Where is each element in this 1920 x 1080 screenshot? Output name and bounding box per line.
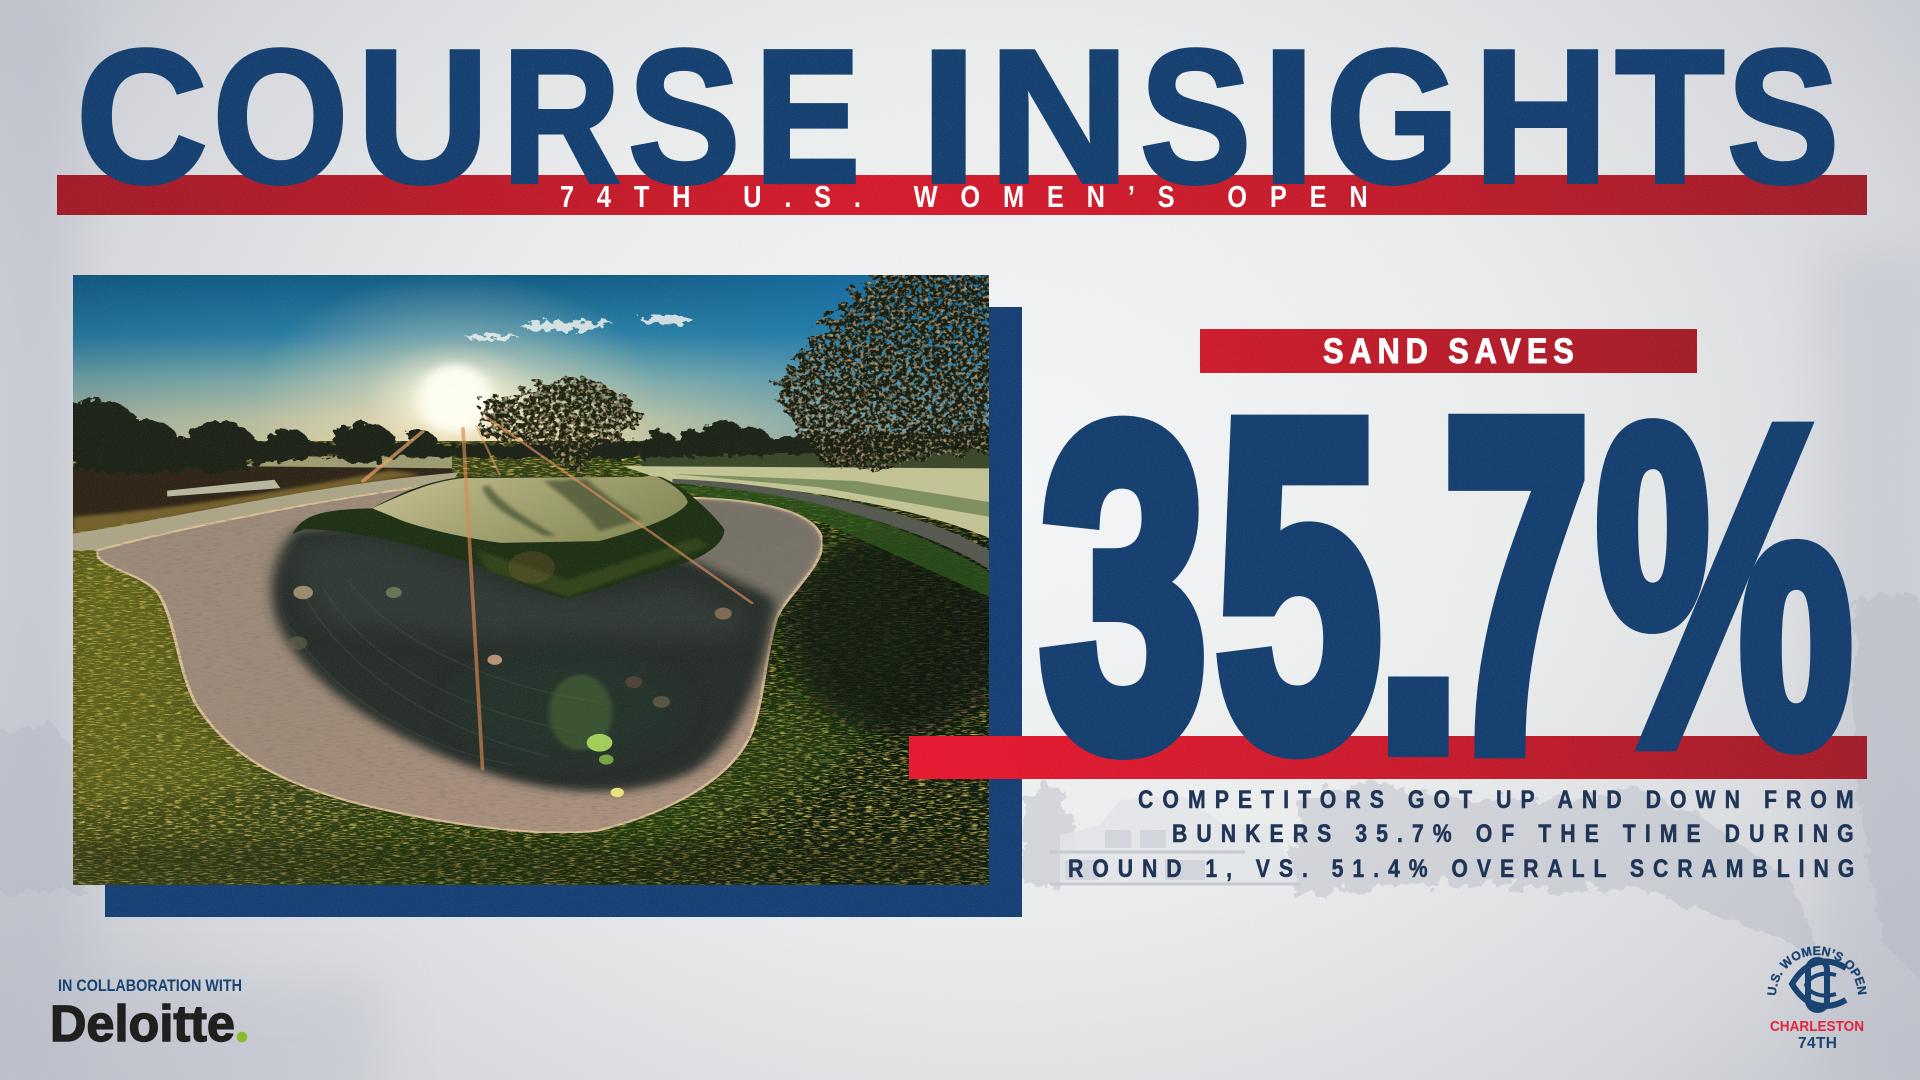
cart path along bunker: [73, 473, 458, 550]
description text: COMPETITORS GOT UP AND DOWN FROM: [1138, 785, 1854, 813]
title: T: [1615, 11, 1724, 223]
sun glow: [276, 280, 633, 441]
red band under stat: [909, 736, 1867, 779]
big number: 35.7%: 3: [1041, 335, 1207, 840]
big number: 35.7%: .: [1376, 393, 1461, 830]
sponsor: Deloitte collaboration: IN COLLABORATION WITH: [58, 977, 242, 995]
bunker sand: [97, 483, 822, 833]
title: C: [76, 11, 208, 223]
rake lines in shadow: [293, 580, 599, 765]
logo: 74th U.S. Women's Open Charleston: [1767, 946, 1867, 1052]
green mound: [293, 477, 724, 599]
stat label box: sand saves: [1200, 329, 1697, 373]
subtitle: 74TH U.S. WOMEN’S OPEN: [560, 180, 1368, 215]
lens flare dots: [288, 551, 732, 797]
title: I: [920, 11, 977, 223]
stat label box: sand saves: SAND SAVES: [1323, 331, 1574, 370]
right tree: [777, 268, 1003, 470]
title: G: [1326, 11, 1459, 223]
logo: 74th U.S. Women's Open Charleston: U.S. WOMEN’S OPEN: [1767, 946, 1867, 996]
title: H: [1473, 11, 1609, 223]
red band under title: [57, 175, 1867, 215]
title: U: [357, 10, 489, 223]
title: S: [1140, 10, 1251, 222]
clouds: [465, 315, 692, 339]
title: S: [628, 11, 740, 223]
big number: 35.7%: [1041, 325, 1854, 845]
big number: 35.7%: %: [1595, 331, 1854, 839]
title: I: [1262, 11, 1315, 223]
lens flare rays: [363, 418, 752, 769]
logo: 74th U.S. Women's Open Charleston: CHARLESTON: [1770, 1019, 1864, 1035]
bunker shadow: [272, 521, 774, 792]
big number: 35.7%: 7: [1444, 325, 1589, 845]
big number: 35.7%: 5: [1216, 328, 1381, 842]
central oak: [479, 376, 639, 470]
sponsor: Deloitte collaboration: Deloitte: [50, 995, 235, 1052]
far fairway right: [623, 447, 989, 597]
title: N: [989, 10, 1130, 222]
title: R: [502, 10, 621, 223]
grass ground: [73, 441, 1015, 887]
photo: golf bunker at sunrise: [55, 268, 1015, 887]
sky: [73, 275, 989, 444]
title: E: [755, 10, 860, 222]
title: [76, 10, 1839, 223]
title: O: [212, 10, 348, 223]
frame: blue offset panel behind photo: [105, 307, 1022, 917]
description text: ROUND 1, VS. 51.4% OVERALL SCRAMBLING: [1068, 854, 1854, 882]
title: S: [1727, 11, 1839, 223]
left shoreline, water and grasses: [73, 454, 452, 534]
description text: BUNKERS 35.7% OF THE TIME DURING: [1172, 819, 1854, 847]
logo: 74th U.S. Women's Open Charleston: 74TH: [1798, 1035, 1837, 1052]
description text: [1068, 785, 1854, 882]
tree line: [55, 400, 989, 475]
